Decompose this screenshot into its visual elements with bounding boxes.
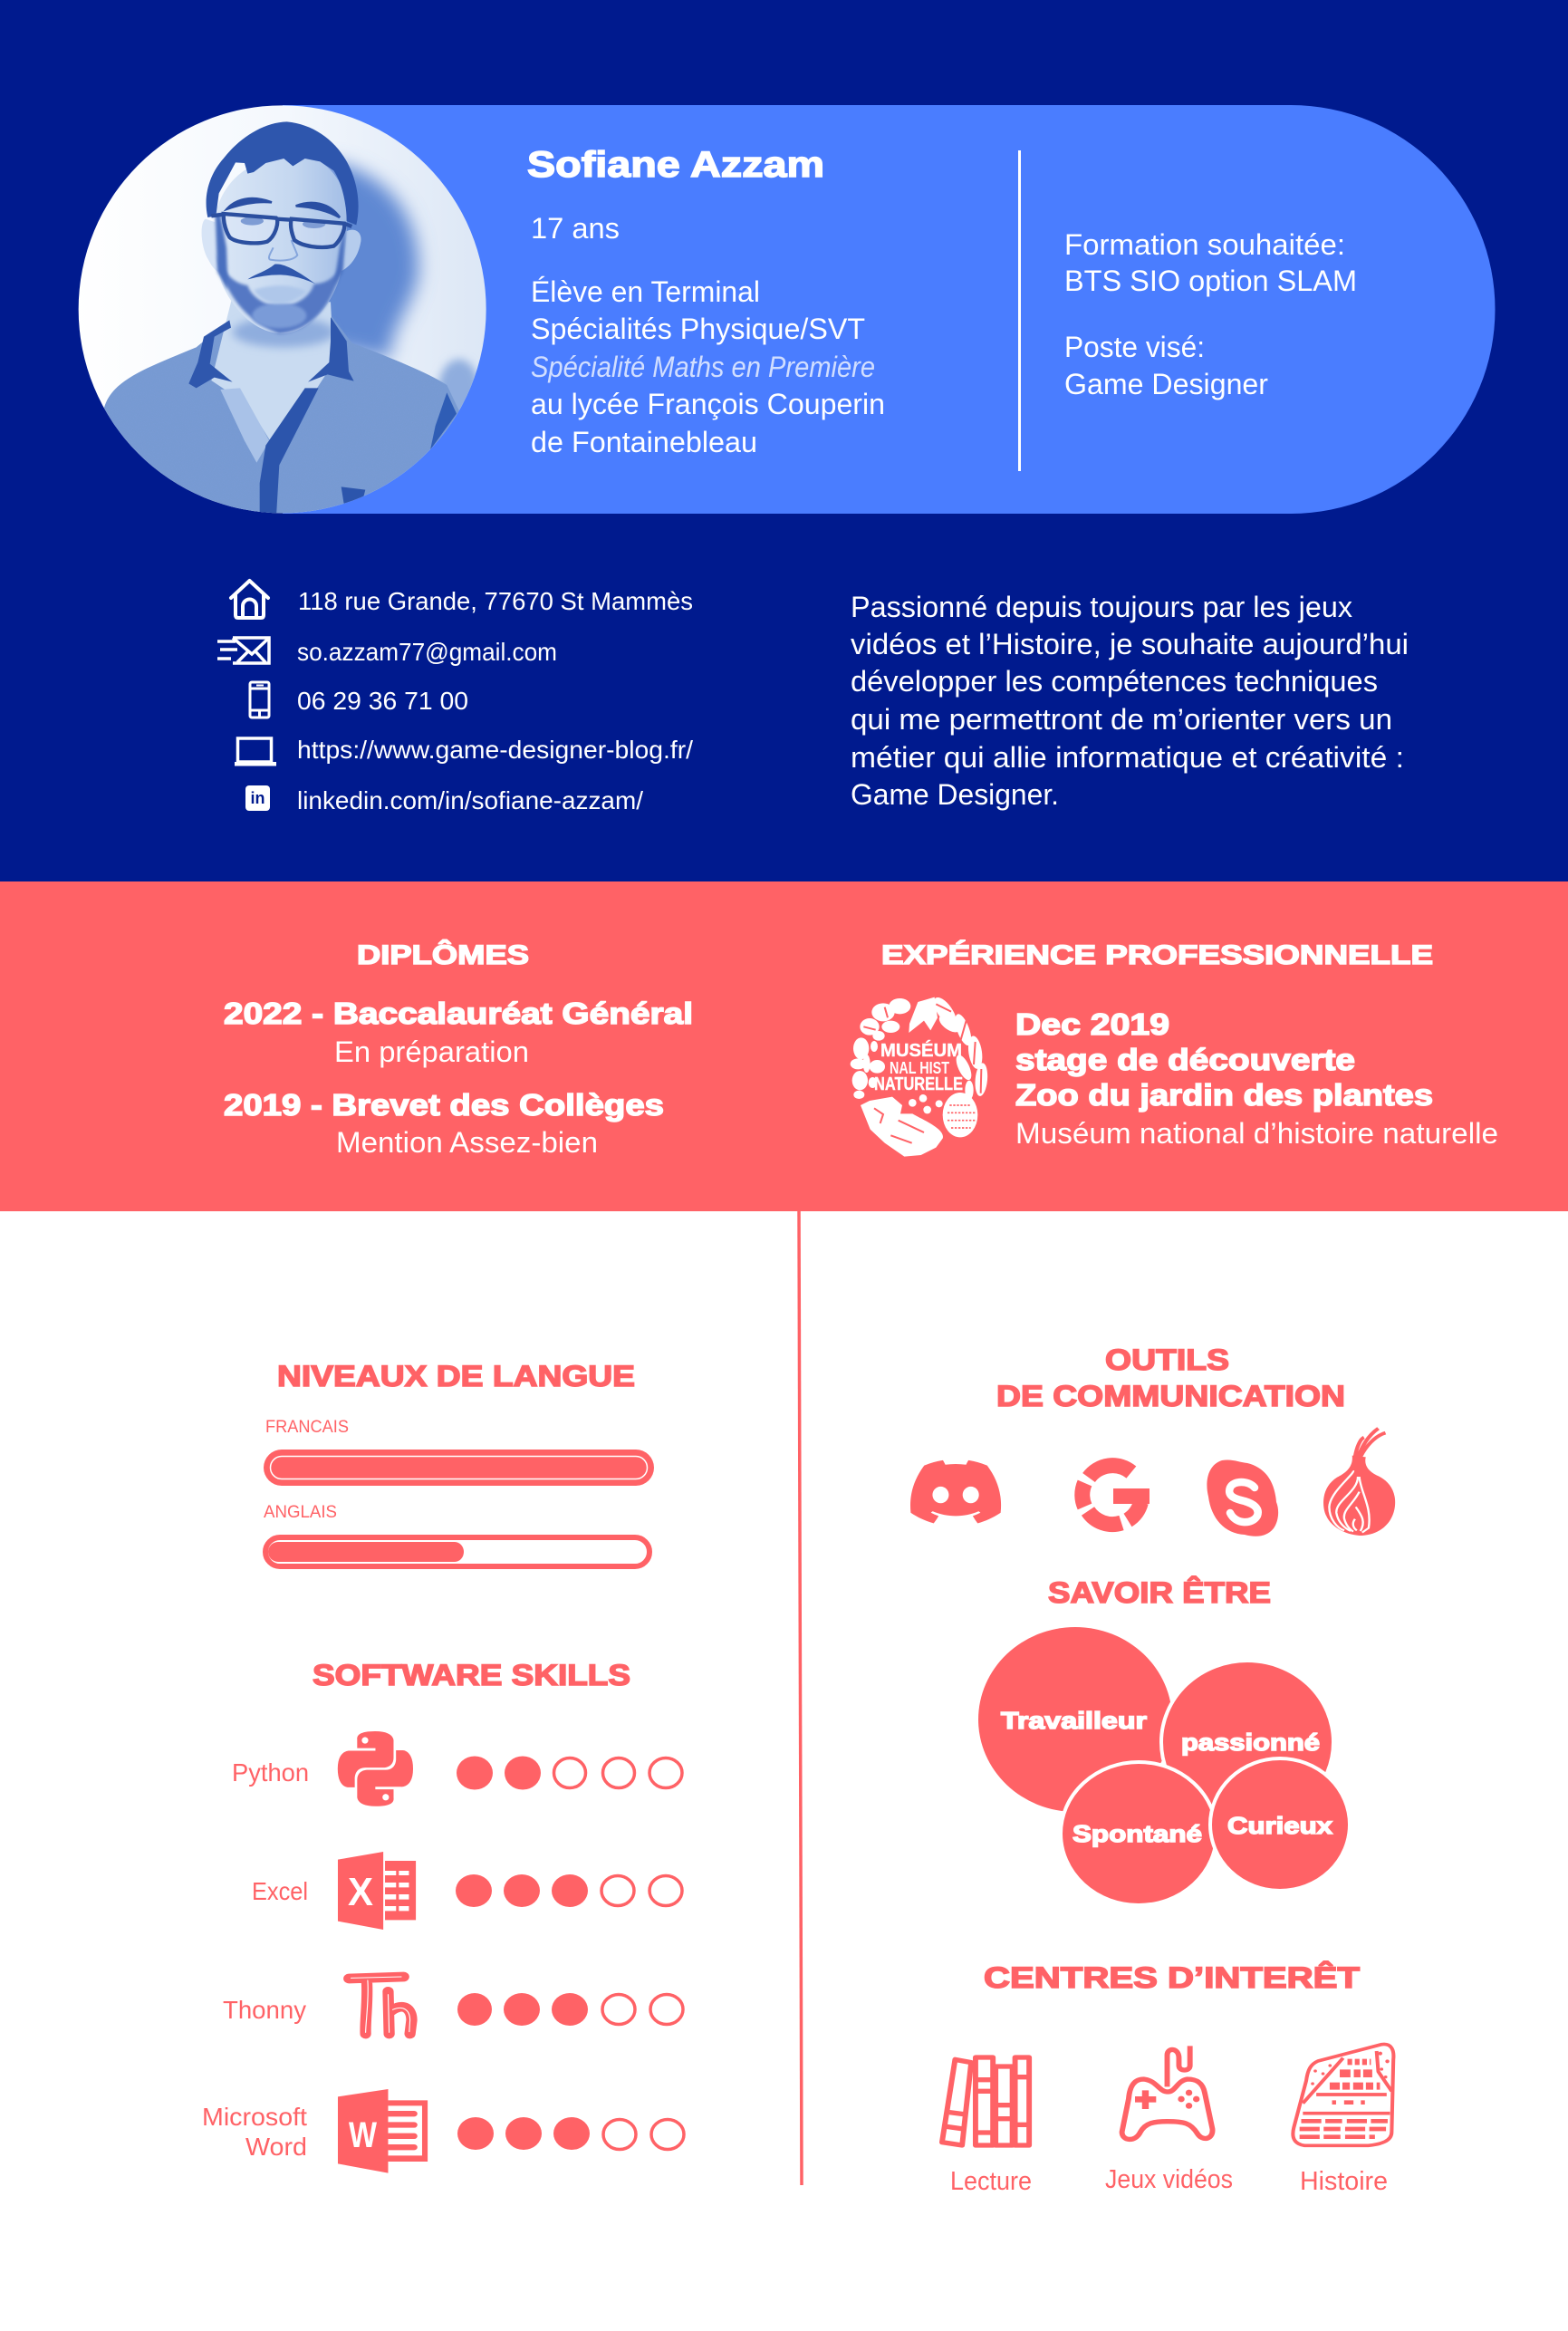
- icon: muséum logo: MUSÉUM: [880, 1040, 962, 1061]
- experience text: Muséum national d’histoire naturelle: [1015, 1117, 1498, 1150]
- skill row: excel: [252, 1852, 682, 1930]
- icon: laptop: [235, 738, 276, 766]
- skill row: excel: X: [348, 1870, 373, 1914]
- identity text block: 17 ans: [531, 212, 620, 245]
- blue profile pill: [283, 105, 1495, 514]
- presentation paragraph: vidéos et l’Histoire, je souhaite aujourd’hui: [851, 628, 1409, 660]
- contact: phone: 06 29 36 71 00: [297, 687, 468, 715]
- navy header background: [0, 0, 1568, 881]
- contact: email: so.azzam77@gmail.com: [297, 638, 557, 666]
- bubble labels: Spontané: [1073, 1820, 1202, 1847]
- icon: books: [942, 2057, 1029, 2145]
- bubble labels: passionné: [1181, 1729, 1320, 1756]
- skill row: microsoft word: W: [349, 2115, 377, 2155]
- formation and target job text: BTS SIO option SLAM: [1064, 265, 1357, 297]
- contact: website: https://www.game-designer-blog.fr/: [297, 736, 693, 764]
- presentation paragraph: Passionné depuis toujours par les jeux: [851, 591, 1352, 623]
- presentation paragraph: qui me permettront de m’orienter vers un: [851, 703, 1392, 736]
- presentation paragraph: métier qui allie informatique et créativité :: [851, 741, 1404, 774]
- bubble labels: [1001, 1707, 1333, 1847]
- skill row: thonny: [223, 1977, 683, 2034]
- heading: software skills: SOFTWARE SKILLS: [313, 1659, 630, 1691]
- diplomas list: Mention Assez-bien: [336, 1126, 598, 1159]
- heading: savoir être: SAVOIR ÊTRE: [1048, 1576, 1271, 1609]
- icon: house: [231, 581, 268, 618]
- contact: address: 118 rue Grande, 77670 St Mammès: [298, 587, 693, 615]
- icon: muséum logo: [851, 994, 989, 1157]
- presentation paragraph: Game Designer.: [851, 778, 1059, 811]
- skill row: python: [232, 1731, 682, 1806]
- icon: rosetta stone: [1293, 2044, 1393, 2145]
- icon: onion: [1323, 1429, 1395, 1536]
- heading: outils de communication: [996, 1344, 1345, 1412]
- identity text block: Spécialités Physique/SVT: [531, 313, 865, 345]
- formation and target job text: Poste visé:: [1064, 331, 1205, 363]
- language bar: français: [264, 1418, 654, 1486]
- diplomas list: [224, 997, 693, 1159]
- experience text: Dec 2019: [1015, 1007, 1169, 1041]
- identity text block: au lycée François Couperin: [531, 388, 885, 420]
- bubble: curieux: [1210, 1758, 1350, 1891]
- formation and target job text: [1064, 228, 1357, 400]
- bubble: travailleur: [978, 1627, 1172, 1812]
- skill row: python: Python: [232, 1758, 309, 1787]
- interest label: histoire: Histoire: [1300, 2167, 1388, 2196]
- interest label: jeux vidéos: Jeux vidéos: [1105, 2165, 1233, 2194]
- icon: envelope: [217, 638, 269, 663]
- experience text: Zoo du jardin des plantes: [1015, 1078, 1433, 1112]
- coral band background: [0, 881, 1568, 1211]
- icon: muséum logo: NAL HIST: [890, 1059, 949, 1077]
- heading: niveaux de langue: NIVEAUX DE LANGUE: [277, 1360, 635, 1392]
- heading: centres d'intérêt: CENTRES D’INTERÊT: [984, 1961, 1361, 1994]
- identity text block: Spécialité Maths en Première: [531, 351, 875, 383]
- formation and target job text: Game Designer: [1064, 368, 1268, 400]
- name: Sofiane Azzam: [527, 145, 824, 185]
- icon: muséum logo: NATURELLE: [874, 1074, 963, 1094]
- language bar: anglais: ANGLAIS: [264, 1503, 337, 1522]
- bubble labels: Travailleur: [1001, 1707, 1147, 1734]
- icon: phone: [250, 682, 269, 718]
- bubble: passionné: [1161, 1661, 1333, 1824]
- identity text block: Élève en Terminal: [531, 275, 760, 308]
- skill row: microsoft word: Microsoft: [202, 2103, 307, 2131]
- presentation paragraph: [851, 591, 1409, 811]
- identity text block: [531, 212, 885, 458]
- formation and target job text: Formation souhaitée:: [1064, 228, 1345, 261]
- diplomas list: En préparation: [334, 1035, 529, 1068]
- vertical column divider: [799, 1211, 802, 2185]
- icon: linkedin: in: [250, 789, 265, 807]
- contact: linkedin: linkedin.com/in/sofiane-azzam/: [297, 786, 643, 814]
- language bar: anglais: [264, 1503, 649, 1566]
- presentation paragraph: développer les compétences techniques: [851, 665, 1378, 698]
- icon: google: [1082, 1466, 1150, 1525]
- skill row: microsoft word: [202, 2089, 684, 2173]
- bubble: spontané: [1061, 1762, 1217, 1905]
- skill row: excel: Excel: [252, 1877, 308, 1905]
- diplomas list: 2019 - Brevet des Collèges: [224, 1088, 664, 1122]
- experience text: [1015, 1007, 1498, 1150]
- identity text block: de Fontainebleau: [531, 426, 757, 458]
- heading: outils de communication: OUTILS: [1105, 1344, 1229, 1376]
- interest label: lecture: Lecture: [950, 2167, 1032, 2196]
- bubble labels: Curieux: [1227, 1812, 1333, 1839]
- diplomas list: 2022 - Baccalauréat Général: [224, 997, 693, 1030]
- portrait photo: [72, 100, 495, 523]
- icon: skype: [1207, 1459, 1278, 1536]
- language bar: français: FRANCAIS: [265, 1418, 349, 1437]
- heading: diplômes: DIPLÔMES: [357, 939, 529, 970]
- experience text: stage de découverte: [1015, 1043, 1355, 1076]
- heading: expérience professionnelle: EXPÉRIENCE PROFESSIONNELLE: [881, 939, 1433, 970]
- skill row: microsoft word: Word: [245, 2133, 307, 2161]
- skill row: thonny: Thonny: [223, 1996, 306, 2024]
- heading: outils de communication: DE COMMUNICATION: [996, 1380, 1345, 1412]
- icon: linkedin: [245, 785, 270, 811]
- icon: gamepad: [1122, 2046, 1213, 2139]
- icon: discord: [910, 1460, 1001, 1523]
- vertical divider in pill: [1018, 150, 1021, 471]
